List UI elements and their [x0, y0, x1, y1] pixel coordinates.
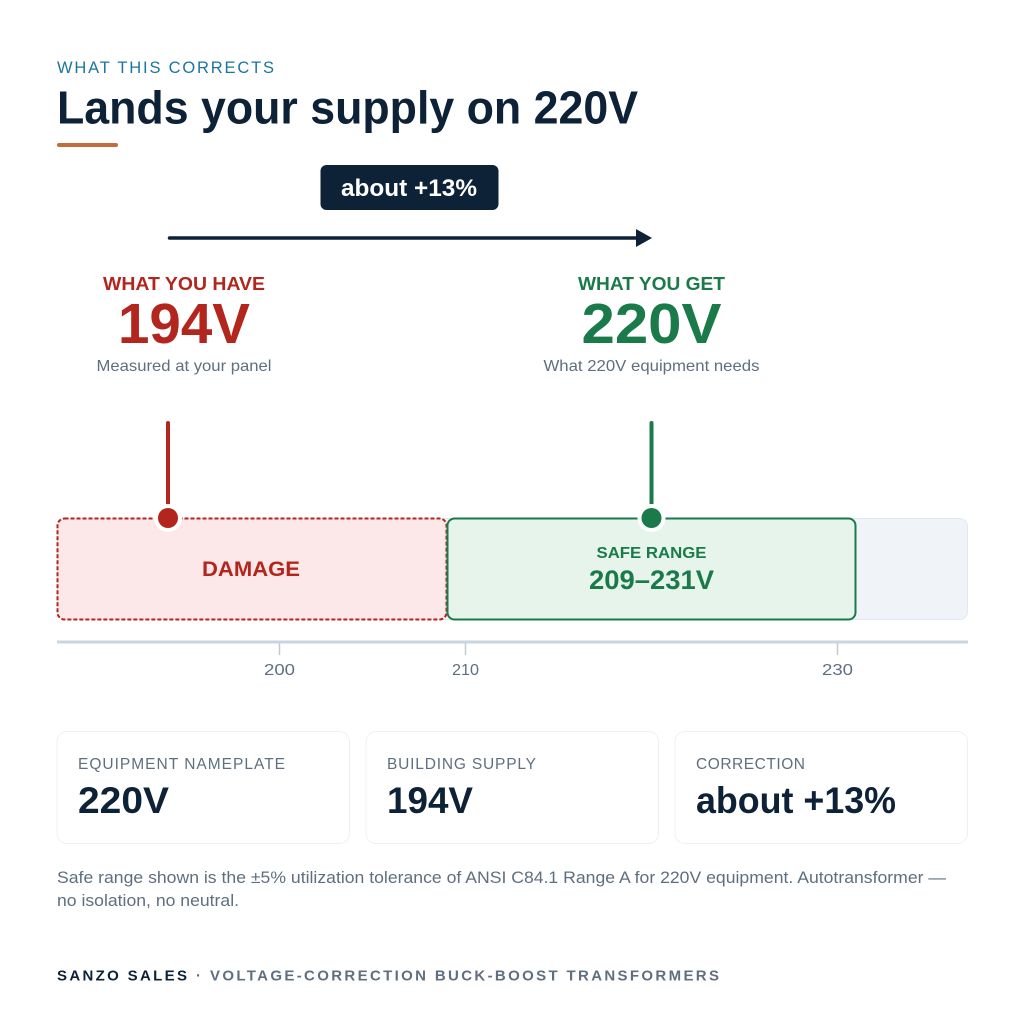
voltage axis [57, 642, 968, 679]
card: building supply: BUILDING SUPPLY [387, 756, 536, 773]
zone: damage [58, 518, 446, 620]
readout: what you get: What 220V equipment needs [544, 358, 760, 375]
card: correction [675, 732, 968, 844]
card: correction: about +13% [696, 780, 896, 821]
readout: what you get: WHAT YOU GET [578, 274, 725, 294]
zone: safe range: SAFE RANGE [596, 545, 707, 562]
readout: what you have: WHAT YOU HAVE [103, 274, 265, 294]
readout: what you get: 220V [582, 292, 722, 356]
brand footer: · [196, 968, 201, 984]
marker: 220V pin [638, 423, 666, 532]
card: equipment nameplate [57, 732, 350, 844]
card: building supply: 194V [387, 780, 473, 821]
readout: what you have [96, 274, 272, 375]
badge: about +13% [320, 165, 498, 210]
badge: about +13%: about +13% [341, 175, 477, 202]
footnote [57, 868, 946, 910]
voltage axis: 230 [822, 662, 853, 679]
voltage axis: 200 [264, 662, 295, 679]
footnote: Safe range shown is the ±5% utilization tolerance of ANSI C84.1 Range A for 220V equipment. Autotransformer — [57, 868, 946, 887]
zone: safe range [448, 518, 856, 620]
card: building supply [366, 732, 658, 844]
zone: damage: DAMAGE [202, 558, 300, 581]
brand footer: VOLTAGE-CORRECTION BUCK-BOOST TRANSFORMERS [210, 968, 719, 984]
title: Lands your supply on 220V [57, 82, 638, 134]
eyebrow heading: WHAT THIS CORRECTS [57, 59, 274, 77]
arrow from 194V to 220V [170, 229, 652, 247]
footnote: no isolation, no neutral. [57, 891, 239, 910]
voltage axis: 210 [452, 662, 479, 679]
panel: voltage scale track [58, 518, 968, 620]
marker: 194V pin [154, 423, 182, 532]
title accent rule [57, 143, 118, 147]
readout: what you get [544, 274, 760, 375]
card: equipment nameplate: 220V [78, 780, 169, 821]
card: correction: CORRECTION [696, 756, 805, 773]
card: equipment nameplate: EQUIPMENT NAMEPLATE [78, 756, 285, 773]
readout: what you have: Measured at your panel [96, 358, 272, 375]
brand footer: SANZO SALES [57, 968, 187, 984]
zone: safe range: 209–231V [589, 565, 714, 595]
readout: what you have: 194V [118, 292, 250, 356]
